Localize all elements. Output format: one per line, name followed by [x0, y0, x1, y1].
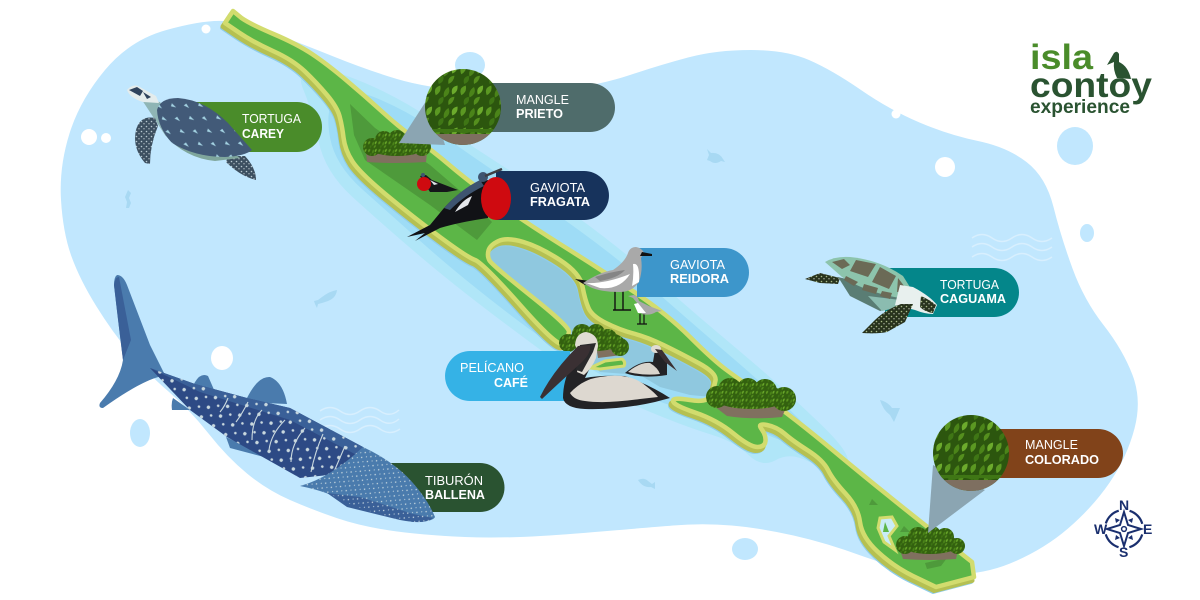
turtle: carey	[127, 86, 256, 180]
pelican small	[625, 345, 677, 377]
pill: tortuga carey: TORTUGA	[242, 112, 302, 126]
compass: N	[1119, 497, 1129, 513]
pill: mangle prieto: MANGLE	[516, 93, 569, 107]
mangrove cluster north	[363, 130, 431, 163]
pill: mangle colorado: COLORADO	[1025, 453, 1099, 467]
pill: mangle colorado	[985, 429, 1123, 478]
logo: isla contoy experience: experience	[1030, 97, 1130, 118]
body	[150, 368, 395, 478]
small silhouettes: fish, turtle, seahorse	[125, 149, 900, 489]
mangrove cluster center	[559, 324, 629, 358]
mangrove callout: colorado	[928, 415, 1009, 533]
pill: mangle prieto: PRIETO	[516, 107, 563, 121]
compass: S	[1119, 544, 1128, 560]
mangrove cluster south	[706, 378, 796, 418]
pill: gaviota fragata: GAVIOTA	[530, 181, 586, 195]
compass: W	[1094, 521, 1108, 537]
body stripes	[220, 398, 345, 474]
pill: pelicano cafe: PELÍCANO	[460, 360, 524, 375]
pill: tortuga caguama: CAGUAMA	[940, 292, 1006, 306]
pill: tiburon ballena: BALLENA	[425, 488, 485, 502]
pill: gaviota reidora	[637, 248, 749, 297]
fins	[172, 375, 215, 410]
dark vegetation patches	[350, 104, 492, 240]
pill: gaviota fragata: FRAGATA	[530, 195, 590, 209]
pill: pelicano cafe	[445, 351, 570, 401]
small strip below center mangrove	[590, 359, 625, 369]
lagoon	[487, 237, 717, 397]
pill: tiburon ballena	[380, 463, 504, 512]
mangrove callout: prieto	[399, 69, 501, 148]
pill: tortuga caguama	[885, 268, 1019, 317]
whale shark	[99, 275, 435, 522]
logo: isla contoy experience: isla	[1030, 38, 1094, 77]
pill: gaviota reidora: REIDORA	[670, 272, 729, 286]
turtle: caguama	[805, 257, 937, 333]
tail	[99, 275, 165, 408]
compass	[1094, 497, 1152, 560]
pill: tortuga caguama: TORTUGA	[940, 278, 1000, 292]
pill: gaviota reidora: GAVIOTA	[670, 258, 726, 272]
pill: tortuga carey	[190, 102, 322, 152]
pond	[878, 517, 897, 550]
compass: E	[1143, 521, 1152, 537]
waves left	[320, 408, 400, 432]
mangrove cluster southeast	[896, 526, 965, 560]
head	[300, 447, 435, 522]
pill: pelicano cafe: CAFÉ	[494, 375, 528, 390]
bubbles and splashes	[81, 24, 1094, 560]
pelican large	[540, 332, 670, 409]
island shallow water halo	[301, 69, 848, 467]
pill: gaviota fragata	[496, 171, 609, 220]
waves right	[972, 234, 1052, 260]
logo: isla contoy experience: contoy	[1030, 66, 1153, 105]
island	[222, 11, 974, 592]
gull large	[575, 247, 652, 310]
frigatebird small	[417, 173, 458, 192]
pill: tortuga carey: CAREY	[242, 127, 285, 141]
logo: isla contoy experience	[1030, 38, 1153, 118]
pill: mangle prieto	[470, 83, 615, 132]
logo pelican	[1107, 52, 1131, 79]
pill: mangle colorado: MANGLE	[1025, 438, 1078, 452]
gull small	[628, 295, 662, 324]
pill: tiburon ballena: TIBURÓN	[425, 473, 483, 488]
frigatebird large	[407, 169, 511, 241]
